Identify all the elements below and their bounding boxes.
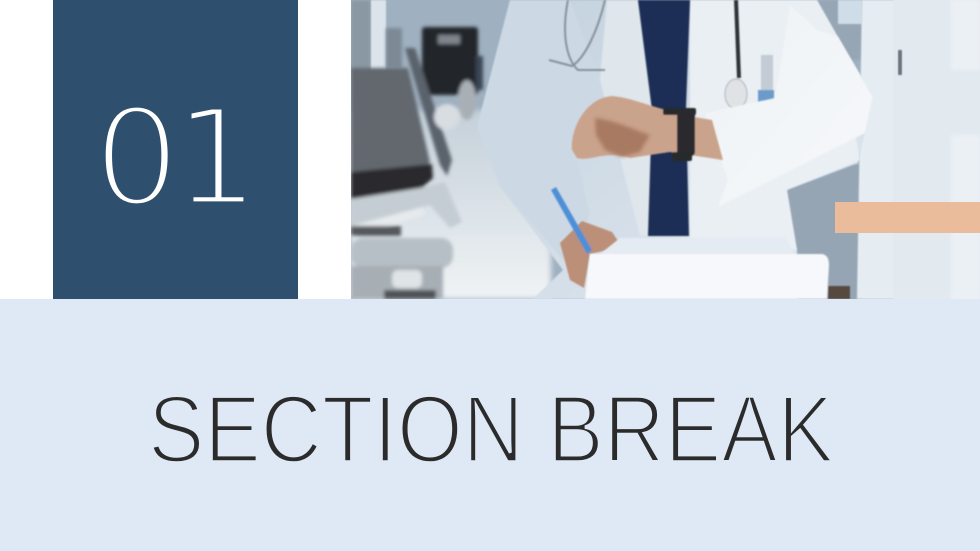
hand holding blue pen xyxy=(551,187,622,288)
section number: 0 xyxy=(93,80,180,238)
section number: 1 xyxy=(173,80,260,238)
wheelchair xyxy=(405,27,483,176)
arm and wristwatch xyxy=(572,96,723,161)
background wall and floor xyxy=(351,0,980,299)
navy scrubs xyxy=(638,0,690,236)
photo: doctor checking wristwatch in a hospital corridor xyxy=(351,0,980,299)
hospital bed xyxy=(351,68,462,299)
door and frame xyxy=(787,0,980,305)
clipboard paper xyxy=(585,237,850,299)
panel: section number xyxy=(53,0,298,299)
title: SECTION BREAK xyxy=(148,376,834,483)
white lab coat xyxy=(477,0,873,299)
stethoscope xyxy=(549,0,774,109)
section number xyxy=(93,80,260,238)
sleeve of raised arm xyxy=(705,5,873,207)
accent bar xyxy=(835,202,980,233)
panel: title band xyxy=(0,299,980,551)
